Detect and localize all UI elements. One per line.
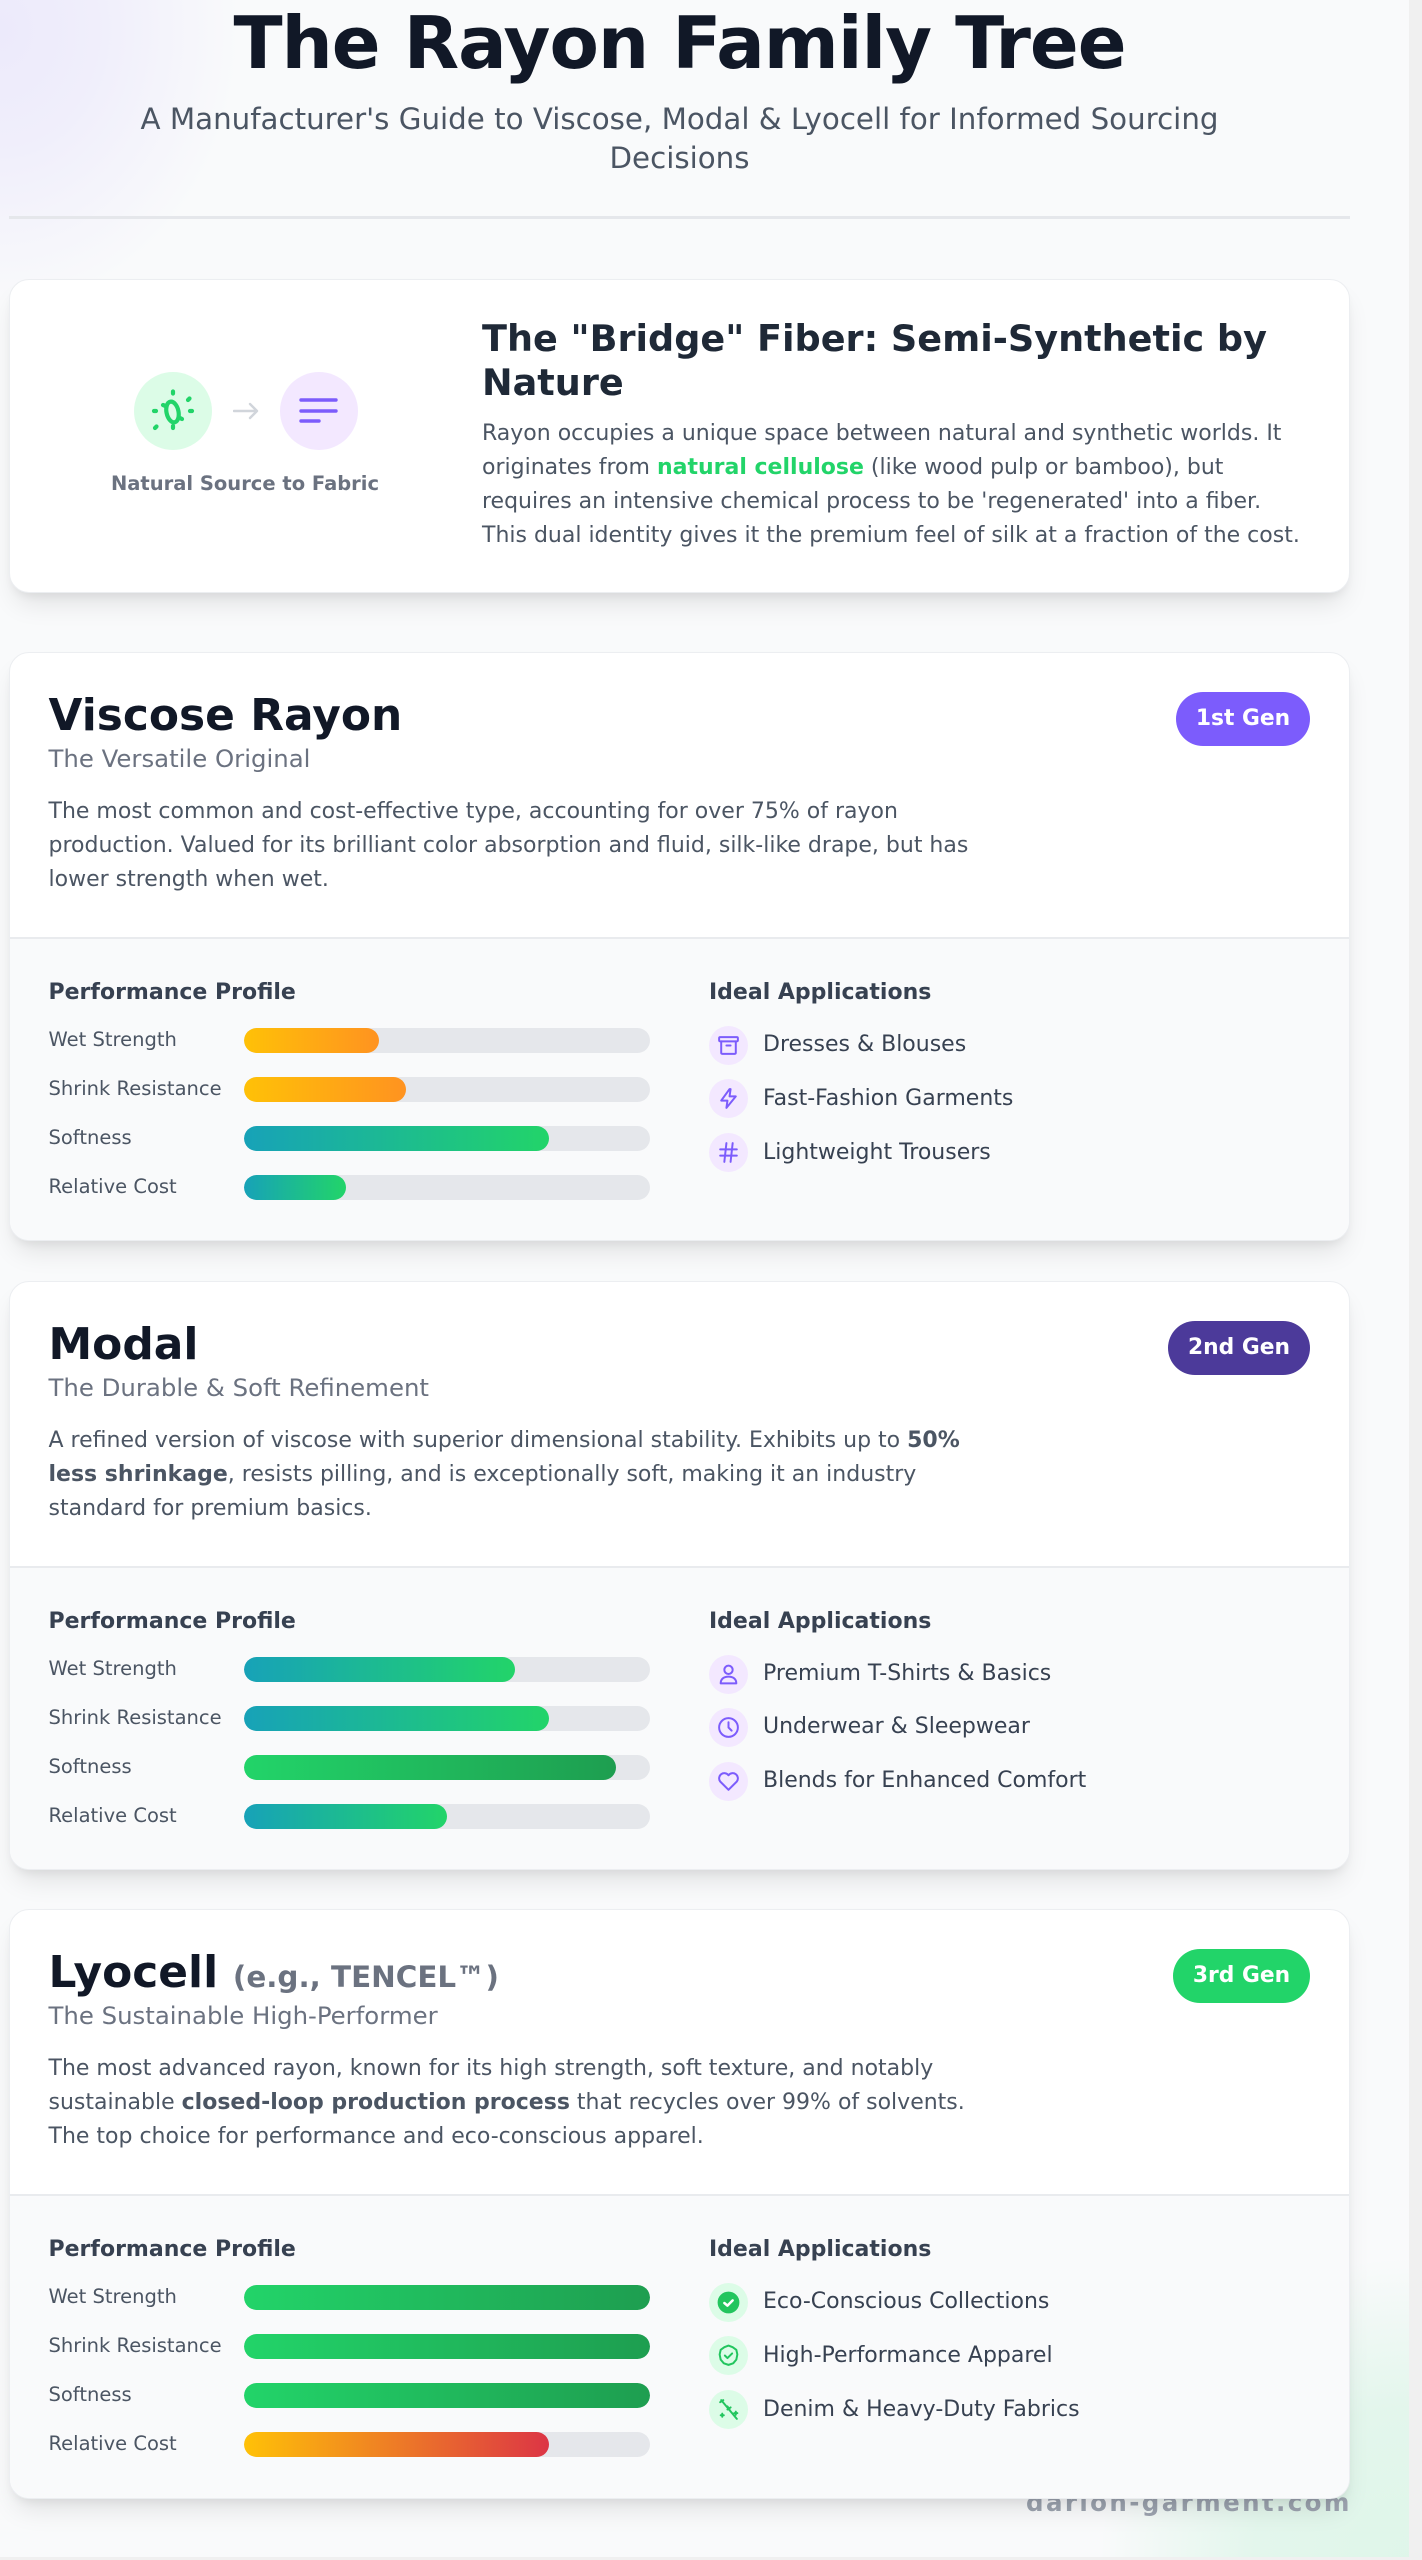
bar (244, 1028, 650, 1053)
bar (244, 1706, 650, 1731)
arrow (233, 402, 258, 420)
watermark: darion-garment.com (1026, 2488, 1352, 2517)
icon: fabric (280, 372, 358, 450)
icon: clock (709, 1708, 748, 1747)
name: Modal (48, 1319, 198, 1370)
application: Blends for Enhanced Comfort (763, 1768, 1086, 1793)
body text: This dual identity gives it the premium feel of silk at a fraction of the cost. (482, 523, 1300, 548)
bar (244, 2285, 650, 2310)
softness: Softness (48, 1755, 132, 1778)
softness: Softness (48, 1126, 132, 1149)
heading: Nature (482, 361, 624, 404)
shrink resistance: Shrink Resistance (48, 1706, 222, 1729)
tagline: The Versatile Original (48, 744, 310, 772)
application: Lightweight Trousers (763, 1140, 991, 1165)
header rule (9, 216, 1350, 219)
diagram: natural source to fabric (111, 372, 379, 495)
relative cost: Relative Cost (48, 1175, 177, 1198)
heading (482, 317, 1267, 404)
icon: natural source (134, 372, 212, 450)
panel: lyocell (9, 1909, 1350, 2499)
heading: The "Bridge" Fiber: Semi-Synthetic by (482, 317, 1267, 360)
description: A refined version of viscose with superior dimensional stability. Exhibits up to 50% (48, 1428, 960, 1452)
softness: Softness (48, 2383, 132, 2406)
application: Denim & Heavy-Duty Fabrics (763, 2397, 1080, 2422)
description: sustainable closed-loop production process that recycles over 99% of solvents. (48, 2090, 965, 2115)
badge (1168, 1320, 1310, 1374)
description: standard for premium basics. (48, 1496, 372, 1521)
description (48, 1428, 960, 1521)
relative cost: Relative Cost (48, 1804, 177, 1827)
decorative green glow (1100, 2260, 1409, 2557)
title: The Rayon Family Tree (233, 1, 1126, 85)
bar (244, 1126, 650, 1151)
bar (244, 1657, 650, 1682)
icon: solid check (709, 2282, 748, 2322)
panel: bridge fiber intro (9, 279, 1350, 593)
wet strength: Wet Strength (48, 1657, 177, 1680)
tagline: The Durable & Soft Refinement (48, 1372, 429, 1402)
body text (482, 420, 1300, 548)
bar chart: performance profile (48, 2285, 650, 2457)
application: Eco-Conscious Collections (763, 2288, 1049, 2314)
wet strength: Wet Strength (48, 2285, 177, 2308)
lower section (10, 1566, 1349, 1869)
description: The most common and cost-effective type, accounting for over 75% of rayon (48, 798, 898, 824)
description: lower strength when wet. (48, 867, 329, 892)
bar chart: performance profile (48, 1657, 650, 1829)
lower section (10, 2194, 1349, 2498)
name: Viscose Rayon (48, 690, 402, 741)
bar chart: performance profile (48, 1028, 650, 1200)
wet strength: Wet Strength (48, 1028, 177, 1051)
application: Underwear & Sleepwear (763, 1714, 1030, 1739)
panel: viscose rayon (9, 652, 1350, 1241)
application: High-Performance Apparel (763, 2343, 1053, 2368)
subtitle: A Manufacturer's Guide to Viscose, Modal & Lyocell for Informed Sourcing (140, 102, 1218, 136)
subtitle: Decisions (610, 140, 750, 174)
icon: sparkle wand (709, 2390, 748, 2429)
relative cost: Relative Cost (48, 2432, 177, 2455)
icon: user (709, 1654, 748, 1694)
bar (244, 2334, 650, 2359)
performance heading: Performance Profile (48, 980, 296, 1004)
icon: hash (709, 1133, 748, 1172)
name: Lyocell (e.g., TENCEL™) (48, 1947, 499, 1998)
applications heading: Ideal Applications (709, 2236, 931, 2262)
panel: modal (9, 1281, 1350, 1870)
bar (244, 1175, 650, 1200)
body text: requires an intensive chemical process to be 'regenerated' into a fiber. (482, 489, 1261, 514)
badge: 1st Gen (1196, 706, 1290, 730)
icon: bolt (709, 1079, 748, 1118)
applications heading: Ideal Applications (709, 1608, 931, 1634)
applications heading: Ideal Applications (709, 980, 931, 1004)
application: Dresses & Blouses (763, 1032, 966, 1056)
description: less shrinkage, resists pilling, and is exceptionally soft, making it an industry (48, 1462, 916, 1487)
caption: Natural Source to Fabric (111, 472, 379, 495)
performance heading: Performance Profile (48, 1608, 296, 1634)
shrink resistance: Shrink Resistance (48, 1077, 222, 1100)
description: The top choice for performance and eco-conscious apparel. (48, 2124, 704, 2149)
icon: heart (709, 1762, 748, 1801)
shrink resistance: Shrink Resistance (48, 2334, 222, 2357)
description: production. Valued for its brilliant color absorption and fluid, silk-like drape, but has (48, 833, 968, 858)
tagline: The Sustainable High-Performer (48, 2000, 438, 2030)
decorative purple glow (0, 0, 260, 300)
bar (244, 1804, 650, 1829)
bar (244, 1077, 650, 1102)
bar (244, 2383, 650, 2408)
icon: check badge (709, 2336, 748, 2375)
application: Fast-Fashion Garments (763, 1086, 1013, 1111)
icon: archive box (709, 1026, 748, 1064)
lower section (10, 937, 1349, 1240)
body text: Rayon occupies a unique space between natural and synthetic worlds. It (482, 420, 1281, 446)
application: Premium T-Shirts & Basics (763, 1660, 1051, 1686)
badge: 2nd Gen (1188, 1334, 1290, 1360)
performance heading: Performance Profile (48, 2236, 296, 2262)
bar (244, 1755, 650, 1780)
body text: originates from natural cellulose (like wood pulp or bamboo), but (482, 455, 1223, 480)
subtitle (140, 102, 1218, 174)
description (48, 798, 968, 892)
description (48, 2056, 965, 2149)
badge (1176, 692, 1310, 746)
description: The most advanced rayon, known for its high strength, soft texture, and notably (48, 2056, 933, 2080)
badge (1173, 1948, 1310, 2002)
badge: 3rd Gen (1193, 1962, 1290, 1988)
bar (244, 2432, 650, 2457)
